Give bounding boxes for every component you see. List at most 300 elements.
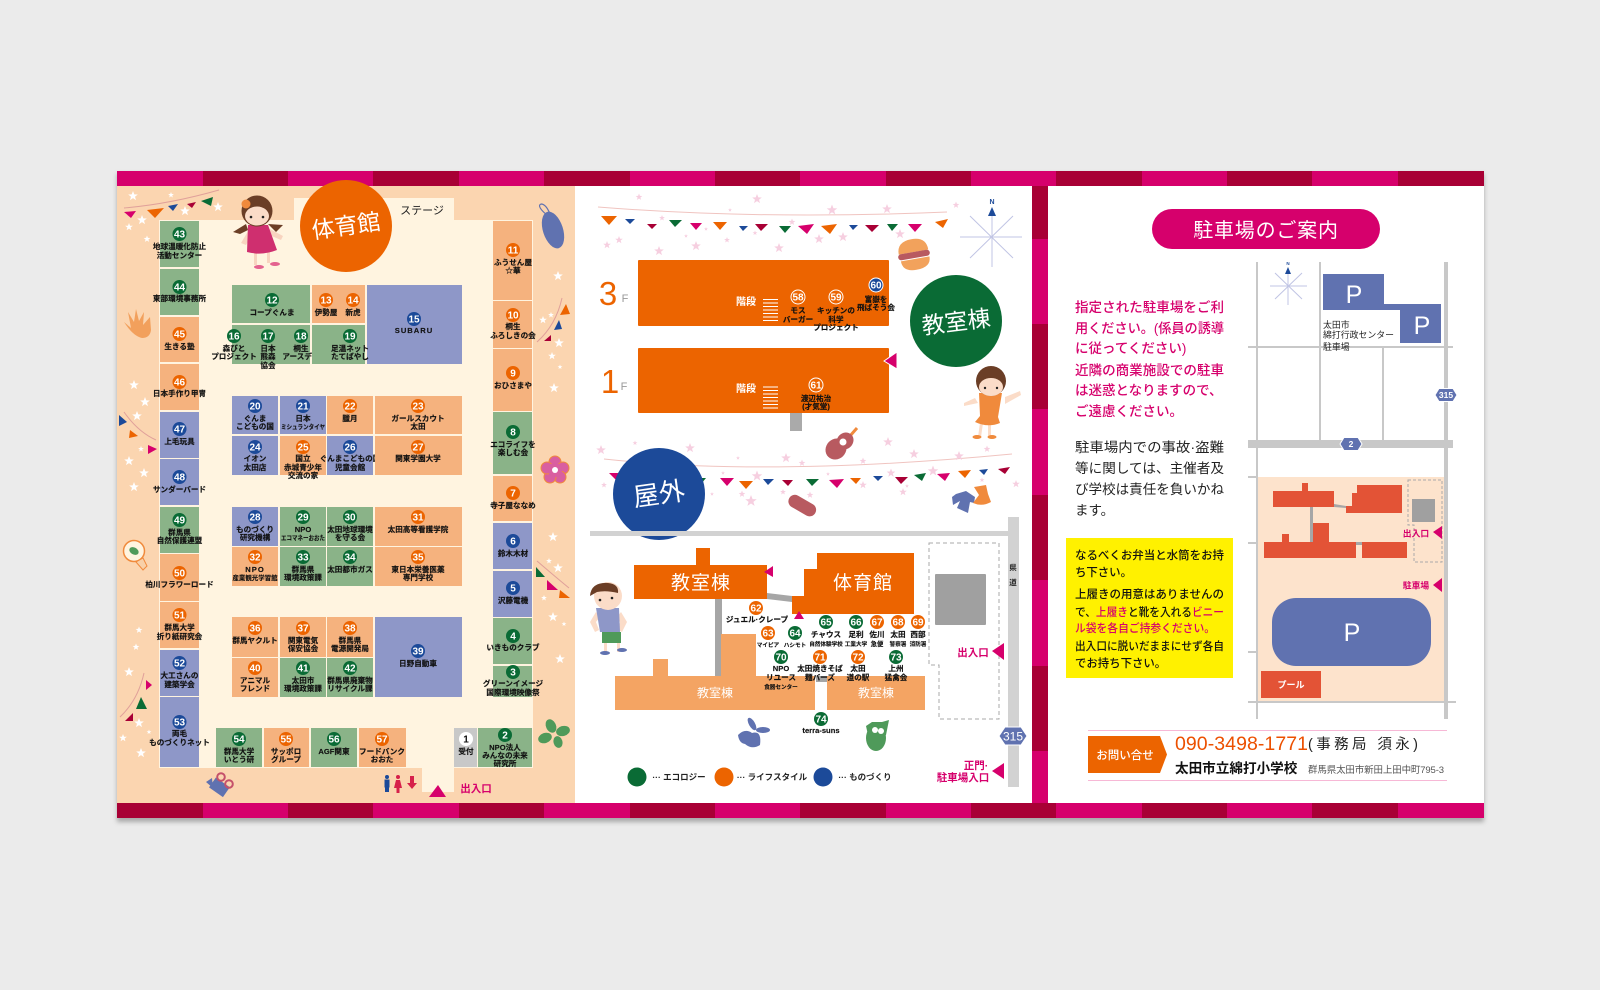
booth 24: イオン xyxy=(244,454,267,463)
booth 52: 大工さんの xyxy=(161,670,199,680)
booth 70: リユース xyxy=(766,673,796,682)
booth 23: 太田 xyxy=(410,421,426,431)
booths 13 and 14: 13 xyxy=(320,296,332,306)
booth 11: 11 xyxy=(508,246,519,256)
booth 5: 沢藤電機 xyxy=(498,595,529,605)
booth 50: 50 xyxy=(174,568,185,580)
lower classroom buildings: 教室棟 xyxy=(697,685,733,700)
booth 34 xyxy=(327,547,373,586)
booth 47: 47 xyxy=(174,424,185,436)
administrative center parking: P xyxy=(1414,312,1430,340)
lower classroom buildings xyxy=(615,634,925,710)
booth 32: 産業観光学習館 xyxy=(232,573,278,582)
booth 32: NPO xyxy=(245,565,265,574)
booth 51: 折り紙研究会 xyxy=(157,631,203,641)
main gate and parking entrance label and arrow xyxy=(937,760,1004,784)
booth 70: NPO xyxy=(773,664,789,673)
booth 45 xyxy=(160,317,199,362)
booths 16 to 18: 森びと xyxy=(223,343,245,353)
booth 58 xyxy=(783,290,813,324)
booth 64: ハシモト xyxy=(784,642,806,649)
booth 30: 30 xyxy=(344,512,356,524)
booth 24: 太田店 xyxy=(244,462,267,472)
school name: 太田市立綿打小学校 xyxy=(1175,760,1298,776)
booth 6: 鈴木木材 xyxy=(498,548,529,558)
booth 53: 53 xyxy=(174,718,185,728)
booth 31: 太田高等看護学院 xyxy=(388,524,449,534)
parking request text xyxy=(1075,299,1224,419)
pink stars and bunting, upper xyxy=(598,194,959,255)
booth 42: リサイクル課 xyxy=(327,683,373,693)
booth 6 xyxy=(493,523,532,569)
booth 60 xyxy=(857,278,895,312)
booth 35: 専門学校 xyxy=(403,572,434,582)
booth 28: ものづくり xyxy=(236,524,274,534)
route 2 marker: 2 xyxy=(1349,439,1354,449)
booth 53: 両毛 xyxy=(172,728,187,738)
booth 33: 環境政策課 xyxy=(284,572,322,582)
booth 42: 群馬県廃棄物 xyxy=(327,675,373,685)
booth 71 xyxy=(797,650,843,682)
toilet icons xyxy=(384,775,417,793)
booth 12: 12 xyxy=(266,296,278,306)
booth 61: 渡辺祐治 xyxy=(801,393,832,403)
main gate and parking entrance label and arrow: 駐車場入口 xyxy=(937,771,989,784)
gymnasium entrance marker xyxy=(794,611,804,619)
main gate and parking entrance label and arrow: 正門· xyxy=(964,760,988,772)
booth 73 xyxy=(885,650,908,682)
booth 51: 群馬大学 xyxy=(164,622,195,632)
booth 55 xyxy=(264,728,309,767)
booth 54: 群馬大学 xyxy=(224,746,255,756)
lower classroom buildings: 教室棟 xyxy=(858,685,894,700)
gymnasium title badge xyxy=(300,180,392,272)
booth 4: 4 xyxy=(510,632,516,642)
booth 36: 36 xyxy=(249,624,261,634)
booth 74: 74 xyxy=(815,714,827,726)
camera icon xyxy=(206,773,233,797)
booth 72: 太田 xyxy=(850,663,866,673)
booth 45: 生きる塾 xyxy=(164,341,195,351)
yellow notice box: で、上履きと靴を入れるビニー xyxy=(1075,605,1224,619)
booth 62 xyxy=(726,601,789,624)
booth 31: 31 xyxy=(412,512,424,524)
booth 46 xyxy=(153,364,206,410)
parking heading pill: 駐車場のご案内 xyxy=(1193,219,1339,242)
booth 3: 3 xyxy=(510,668,516,678)
floor 3 building: 3 xyxy=(599,275,617,312)
booths 16 to 18 xyxy=(211,325,320,370)
booth 57: おおた xyxy=(371,754,393,764)
booth 19: たてばやし xyxy=(331,351,369,361)
phone number xyxy=(1175,733,1418,755)
parking request text: は迷惑となりますので、 xyxy=(1075,383,1223,398)
booths 13 and 14: 14 xyxy=(347,296,359,306)
booths 16 to 18: 17 xyxy=(262,332,274,342)
contact block xyxy=(1088,730,1447,781)
liability notice text: び学校は責任を負いかね xyxy=(1075,482,1225,497)
booth 41: 環境政策課 xyxy=(284,683,322,693)
booth 31 xyxy=(375,507,462,546)
booth 63 xyxy=(757,626,780,649)
booth 23: 23 xyxy=(412,402,424,412)
booth 67: 67 xyxy=(871,618,883,628)
booth 25: 国立 xyxy=(295,453,311,463)
booth 65: 自然体験学校 xyxy=(809,640,843,648)
booth 60: 富嶽を xyxy=(865,294,887,304)
booth 43: 43 xyxy=(174,230,185,240)
booth 35: 東日本栄養医薬 xyxy=(391,564,445,574)
parking map xyxy=(1248,261,1457,719)
booth 28: 研究機構 xyxy=(240,532,271,542)
booth 26 xyxy=(320,436,380,475)
booth 69: 消防署 xyxy=(910,640,927,648)
booth 43: 活動センター xyxy=(157,250,202,260)
booths 16 to 18: 桐生 xyxy=(293,343,309,353)
parking request text: 用ください。(係員の誘導 xyxy=(1075,320,1224,336)
booth 50: 柏川フラワーロード xyxy=(145,579,214,589)
booth 15 xyxy=(367,285,462,364)
booth 42 xyxy=(327,658,373,697)
clothes icon xyxy=(952,485,991,513)
liability notice text: ます。 xyxy=(1075,503,1114,518)
booth 25: 赤城青少年 xyxy=(284,462,322,472)
booth 5: 5 xyxy=(510,584,516,594)
booth 37 xyxy=(280,617,326,657)
booth 61: (才気堂) xyxy=(802,401,830,411)
booth 10: 10 xyxy=(507,310,519,322)
yellow notice box: ル袋を各自ご持参ください。 xyxy=(1075,621,1215,635)
booth 9: おひさまや xyxy=(494,380,532,390)
booth 59: 科学 xyxy=(828,314,844,324)
gymnasium building: 体育館 xyxy=(833,572,893,594)
route 315 sign xyxy=(999,727,1027,745)
light bulb icon xyxy=(124,540,147,570)
booth 44: 東部環境事務所 xyxy=(153,293,206,303)
booth 38: 群馬県 xyxy=(339,635,362,645)
booth 40 xyxy=(232,658,278,697)
booth 25: 交流の家 xyxy=(288,470,319,480)
panel: parking guide xyxy=(1048,186,1484,803)
booth 2: NPO法人 xyxy=(489,742,521,752)
booth 41 xyxy=(280,658,326,697)
floor 1 building xyxy=(601,348,897,431)
booth 48: サンダーバード xyxy=(153,484,206,494)
booth 66: 足利 xyxy=(848,629,864,639)
booth 19: 19 xyxy=(344,332,356,342)
bird icon xyxy=(738,716,770,747)
parking request text: 指定された駐車場をご利 xyxy=(1075,299,1224,315)
booth 25 xyxy=(280,436,326,480)
booth 11: ふうせん屋 xyxy=(494,258,532,267)
booth 44 xyxy=(153,269,206,315)
booth 59: 59 xyxy=(830,292,842,304)
booth 40: 40 xyxy=(249,664,261,674)
booth 47: 上毛玩具 xyxy=(164,436,195,446)
yellow notice box: 出入口に脱いだままにせず各自 xyxy=(1075,639,1224,653)
booth 3: グリーンイメージ xyxy=(483,678,544,688)
boy illustration xyxy=(590,582,627,655)
booth 19: 足温ネット xyxy=(331,343,369,353)
booth 43 xyxy=(153,221,206,267)
booth 23: ガールスカウト xyxy=(391,413,445,423)
booth 68: 太田 xyxy=(890,629,906,639)
booth 51 xyxy=(157,602,203,648)
booth 26: ぐんまこどもの国 xyxy=(320,453,380,463)
prefectural road label: 県 xyxy=(1009,563,1017,572)
booth 38: 38 xyxy=(344,624,356,634)
entrance label and arrow xyxy=(957,643,1004,660)
compass xyxy=(960,199,1022,267)
booth 37: 37 xyxy=(297,624,309,634)
booth 4: いきものクラブ xyxy=(486,642,540,652)
school buildings xyxy=(1264,483,1407,558)
booth 7: 寺子屋ななめ xyxy=(490,500,536,510)
administrative center parking xyxy=(1323,274,1441,343)
booth 35 xyxy=(375,547,462,586)
booth 65: 65 xyxy=(820,618,832,628)
booth 64: 64 xyxy=(789,628,801,640)
main parking lot: P xyxy=(1344,619,1360,647)
liability notice text xyxy=(1075,440,1225,518)
booth 1 reception: 受付 xyxy=(458,746,474,756)
booth 40: フレンド xyxy=(240,684,270,693)
prefectural road label: 道 xyxy=(1009,577,1017,587)
booths 16 to 18: プロジェクト xyxy=(211,351,257,361)
booth 54: 54 xyxy=(233,734,245,746)
decorative frame bands xyxy=(117,171,1484,818)
booth 70: 食器センター xyxy=(764,683,798,691)
booth 6: 6 xyxy=(510,536,516,548)
booth 49 xyxy=(157,507,203,553)
yellow notice box: なるべくお弁当と水筒をお持 xyxy=(1075,548,1224,562)
parking dashed outline xyxy=(929,543,999,719)
legend: ··· ものづくり xyxy=(838,772,892,782)
route 315 marker: 315 xyxy=(1439,390,1453,400)
booths 16 to 18: 16 xyxy=(228,332,240,342)
booth 3 xyxy=(483,665,544,697)
booth 62: ジュエル·クレープ xyxy=(726,614,789,624)
floor 1 building: 階段 xyxy=(736,382,756,395)
outdoor title badge: 屋外 xyxy=(631,476,687,512)
booth 7 xyxy=(490,476,536,521)
booth 10 xyxy=(490,301,536,348)
booth 4 xyxy=(486,618,540,664)
booth 66: 66 xyxy=(850,618,862,628)
address: 群馬県太田市新田上田中町795-3 xyxy=(1308,764,1444,776)
contact tag: お問い合せ xyxy=(1096,748,1154,762)
booth 8 xyxy=(490,412,536,474)
booth 69 xyxy=(910,615,927,648)
floor 3 building xyxy=(599,260,895,332)
booth 27 xyxy=(375,436,462,475)
classroom building title badge: 教室棟 xyxy=(920,305,992,339)
booth 59 xyxy=(813,290,859,332)
yellow notice box xyxy=(1066,538,1233,678)
pink stars and bunting, lower xyxy=(596,437,1020,506)
booth 68: 警察署 xyxy=(890,640,907,648)
booth 27: 27 xyxy=(412,442,424,454)
booth 9 xyxy=(493,349,532,411)
main parking lot xyxy=(1272,598,1431,666)
classroom building title badge xyxy=(910,275,1002,367)
booth 3: 国際環境映像祭 xyxy=(486,687,540,697)
booth 2: みんなの未来 xyxy=(482,750,528,760)
booth 36 xyxy=(232,617,278,657)
route 315 sign: 315 xyxy=(1003,730,1023,744)
booth 20: ぐんま xyxy=(244,414,266,423)
booth 39: 日野自動車 xyxy=(399,658,437,668)
flower icon xyxy=(541,456,569,483)
route 315 marker xyxy=(1435,388,1457,402)
booth 9: 9 xyxy=(510,368,516,380)
owl icon xyxy=(866,720,889,751)
booth 67: 佐川 xyxy=(869,629,885,639)
booth 53: ものづくりネット xyxy=(149,737,210,747)
booth 52: 建築学会 xyxy=(164,679,195,689)
panel: gymnasium floor map xyxy=(117,180,575,803)
booth 59: プロジェクト xyxy=(813,322,859,332)
parking label: 駐車場 xyxy=(1323,341,1350,352)
booth 55: グループ xyxy=(271,754,301,764)
booth 26: 26 xyxy=(344,442,356,454)
booth 68: 68 xyxy=(892,618,904,628)
booth 32 xyxy=(232,547,278,586)
booth 65 xyxy=(809,615,843,648)
entrance label: 出入口 xyxy=(460,782,492,795)
roads xyxy=(590,517,1019,787)
stage label: ステージ xyxy=(400,205,444,217)
booth 69: 西部 xyxy=(910,629,926,639)
yellow notice box: ち下さい。 xyxy=(1075,566,1132,579)
floor 1 building: 1 xyxy=(601,363,619,400)
booth 46: 46 xyxy=(174,378,185,388)
parking request text: 近隣の商業施設での駐車 xyxy=(1075,362,1224,378)
booth 19 xyxy=(312,325,369,364)
booth 62: 62 xyxy=(750,604,762,614)
parking label xyxy=(1323,319,1394,352)
booth 63: マイピア xyxy=(757,642,780,649)
booth 8: 8 xyxy=(510,428,516,438)
booths 13 and 14: 新虎 xyxy=(345,307,361,317)
booth 38: 電源開発局 xyxy=(331,643,369,653)
outdoor title badge xyxy=(613,448,705,540)
booth 21: 21 xyxy=(297,402,309,412)
booth 34: 太田都市ガス xyxy=(327,564,373,574)
booth 65: チャウス xyxy=(811,630,841,639)
booth 73: 猛禽会 xyxy=(885,672,908,682)
booths 13 and 14 xyxy=(312,285,365,323)
booth 70: 70 xyxy=(775,652,787,664)
booth 15: SUBARU xyxy=(395,326,433,335)
booth 15: 15 xyxy=(408,314,420,326)
booth 29 xyxy=(280,507,326,546)
bread icon xyxy=(786,492,818,519)
booth 11 xyxy=(493,221,532,300)
booth 20: 20 xyxy=(249,402,261,412)
booth 60: 60 xyxy=(870,280,882,292)
booths 16 to 18: 協会 xyxy=(260,360,276,370)
booth 30: 太田地球環境 xyxy=(327,524,373,534)
booth 57 xyxy=(359,728,406,767)
legend: ··· ライフスタイル xyxy=(737,772,808,782)
booth 70 xyxy=(764,650,798,691)
booth 27: 関東学園大学 xyxy=(395,453,441,463)
small compass: N xyxy=(1286,261,1290,266)
booth 58: モス xyxy=(790,306,806,315)
booth 30 xyxy=(327,507,373,546)
booth 41: 太田市 xyxy=(292,675,315,685)
booth 21: ミシュランタイヤ xyxy=(281,422,325,431)
booth 32: 32 xyxy=(249,552,261,564)
booth 34: 34 xyxy=(344,552,356,564)
booth 24: 24 xyxy=(249,442,261,454)
legend xyxy=(628,768,892,786)
booth 21: 日本 xyxy=(295,413,311,423)
booth 28: 28 xyxy=(249,512,261,524)
booth 67: 急便 xyxy=(871,639,884,648)
booths 13 and 14: 伊勢屋 xyxy=(315,307,338,317)
pool xyxy=(1261,671,1321,698)
booth 29: エコマネーおおた xyxy=(281,534,325,542)
parking request text: ご遠慮ください。 xyxy=(1075,403,1183,419)
booth 25: 25 xyxy=(297,442,309,454)
booth 35: 35 xyxy=(412,552,424,564)
booth 72: 道の駅 xyxy=(847,672,870,682)
booth 26: 児童会館 xyxy=(335,462,366,472)
booth 5 xyxy=(493,571,532,617)
booths 16 to 18: 熊森 xyxy=(260,351,276,361)
booth 12 xyxy=(232,285,310,323)
booth 11: ☆華 xyxy=(505,265,521,275)
floor 1 building: F xyxy=(621,381,628,393)
booth 33: 33 xyxy=(297,552,309,564)
booth 39: 39 xyxy=(412,646,424,658)
administrative center parking: P xyxy=(1346,281,1362,309)
floor 3 building: F xyxy=(622,293,629,305)
booth 57: 57 xyxy=(376,734,388,746)
booth 29: NPO xyxy=(295,525,311,534)
booth 1 reception: 1 xyxy=(463,734,469,746)
booth 56: 56 xyxy=(328,734,340,746)
booth 59: キッチンの xyxy=(817,306,855,315)
booth 64 xyxy=(784,626,806,649)
booth 55: 55 xyxy=(280,734,292,746)
booth 69: 69 xyxy=(912,618,924,628)
booth 48: 48 xyxy=(174,472,185,484)
booth 73: 73 xyxy=(890,652,902,664)
booth 49: 49 xyxy=(174,516,185,526)
booth 58: バーガー xyxy=(783,314,813,324)
booth 54 xyxy=(216,728,262,767)
booth 63: 63 xyxy=(762,628,774,640)
liability notice text: 駐車場内での事故·盗難 xyxy=(1075,440,1224,455)
booth 74: terra-suns xyxy=(802,726,840,735)
booth 60: 飛ばそう会 xyxy=(857,302,895,312)
booth 42: 42 xyxy=(344,664,356,674)
booth 58: 58 xyxy=(792,292,804,304)
booths 16 to 18: 日本 xyxy=(260,343,276,353)
booth 48 xyxy=(153,459,206,505)
panel: classroom building and outdoor map xyxy=(575,186,1032,803)
booth 56 xyxy=(311,728,357,767)
booth 7: 7 xyxy=(510,488,516,500)
booth 73: 上州 xyxy=(888,663,904,673)
booth 30: を守る会 xyxy=(335,532,366,542)
booth 37: 関東電気 xyxy=(288,635,319,645)
classroom entrance marker xyxy=(764,566,773,577)
booth 36: 群馬ヤクルト xyxy=(232,635,278,645)
